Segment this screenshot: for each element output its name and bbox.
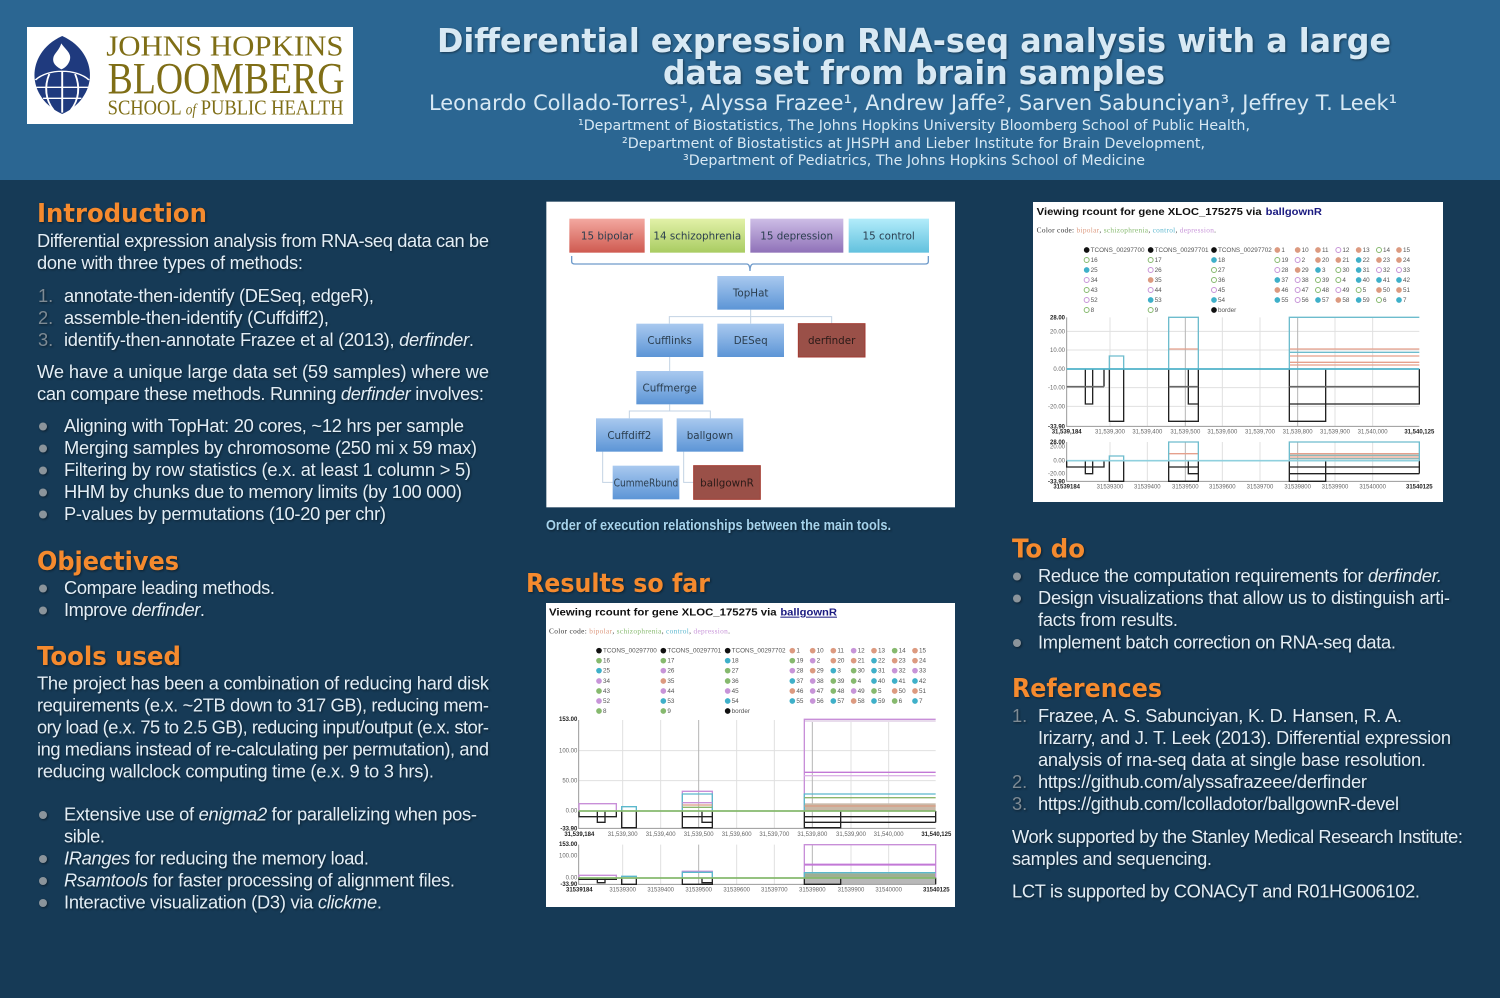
legend: 59: [878, 698, 886, 705]
legend: 58: [858, 698, 865, 705]
overview plot: -33.90: [1048, 479, 1066, 485]
legend: 52: [603, 698, 611, 705]
main plot: -10.00: [1048, 386, 1066, 392]
legend: 40: [878, 678, 886, 685]
legend: 30: [858, 668, 865, 675]
list: objectives: Improve derfinder.: [64, 599, 205, 620]
list: objectives: Compare leading methods.: [64, 577, 275, 598]
tool boxes: derfinder: [808, 335, 856, 347]
legend: 8: [603, 708, 607, 715]
list: derfinder steps: Aligning with TopHat: 20 cores, ~12 hrs per sample: [64, 415, 464, 436]
main plot: [1048, 315, 1435, 436]
main plot: 31,539,900: [836, 832, 867, 838]
legend: 53: [1155, 297, 1162, 304]
tool boxes: CummeRbund: [614, 477, 678, 489]
legend: 50: [899, 688, 906, 695]
legend: 22: [878, 658, 886, 665]
list: references: https://github.com/lcolladotor/ballgownR-devel: [1038, 793, 1399, 814]
legend: 7: [919, 698, 923, 705]
legend: 11: [1322, 247, 1329, 254]
legend: 9: [1155, 307, 1159, 314]
legend: 39: [837, 678, 845, 685]
main plot: 31,539,400: [646, 832, 676, 838]
list: to do items: Reduce the computation requirements for derfinder.: [1038, 565, 1442, 586]
legend: 11: [837, 648, 844, 655]
overview plot: 31539700: [1247, 485, 1274, 491]
overview plot: 31539800: [799, 887, 826, 893]
overview plot: -20.00: [1048, 472, 1066, 478]
legend: 6: [1383, 297, 1387, 304]
overview plot: 31539300: [609, 887, 637, 893]
main plot: 31,539,500: [684, 832, 714, 838]
overview plot: 31540125: [923, 887, 950, 893]
text block: LCT support: LCT is supported by CONACyT and R01HG006102.: [1012, 880, 1420, 902]
main plot: 31,539,800: [1283, 430, 1313, 436]
legend: 47: [1302, 287, 1309, 294]
legend: 12: [1342, 247, 1350, 254]
overview plot: -33.90: [560, 882, 578, 888]
legend: 46: [796, 688, 804, 695]
legend: 18: [1218, 257, 1226, 264]
title: Differential expression RNA-seq analysis with a large: [437, 21, 1391, 60]
main plot: [559, 717, 952, 838]
tool boxes: Cuffdiff2: [607, 430, 651, 442]
overview plot: [1048, 440, 1433, 491]
legend: 37: [1281, 277, 1289, 284]
main plot: 100.00: [559, 748, 578, 754]
list: derfinder steps: HHM by chunks due to memory limits (by 100 000): [64, 481, 462, 502]
chart title and colour code: Viewing rcount for gene XLOC_175275 via: [1037, 207, 1262, 218]
legend: 57: [837, 698, 845, 705]
text block: tools paragraph: requirements (e.x. ~2TB down to 317 GB), reducing mem-: [37, 694, 489, 716]
legend: 57: [1322, 297, 1330, 304]
list: to do items: Design visualizations that allow us to distinguish arti-: [1038, 587, 1450, 608]
logo: Johns Hopkins Bloomberg School of Public Health: BLOOMBERG: [108, 53, 345, 103]
legend: 9: [667, 708, 671, 715]
legend: 27: [732, 668, 739, 675]
main plot: 0.00: [566, 809, 578, 815]
legend: 12: [858, 648, 865, 655]
main plot: -33.90: [560, 827, 578, 833]
legend: 13: [878, 648, 886, 655]
overview plot: 20.00: [1050, 445, 1066, 451]
text block: data set: can compare these methods. Running derfinder involves:: [37, 383, 484, 404]
list: three method types: 1.: [38, 285, 53, 306]
legend: 38: [817, 678, 824, 685]
text block: intro: [37, 230, 489, 273]
overview plot: 0.00: [1053, 459, 1066, 465]
list: references: 3.: [1012, 793, 1027, 814]
legend: 49: [858, 688, 865, 695]
legend: 26: [667, 668, 675, 675]
legend: 44: [1155, 287, 1162, 294]
main plot: 31,539,700: [1245, 430, 1276, 436]
flowchart: order of execution: [546, 202, 955, 507]
legend: 27: [1218, 267, 1226, 274]
legend: 51: [919, 688, 927, 695]
legend: 45: [732, 688, 739, 695]
panel: introduction: [37, 199, 489, 524]
affiliations: [578, 118, 1250, 169]
legend: border: [732, 708, 750, 715]
legend: 31: [1363, 267, 1370, 274]
chart title and colour code: ballgownR: [780, 608, 837, 619]
overview plot: 31539184: [1053, 485, 1081, 491]
affiliations: ²Department of Biostatistics at JHSPH and Lieber Institute for Brain Development,: [622, 136, 1205, 152]
list: references: Frazee, A. S. Sabunciyan, K. D. Hansen, R. A.: [1038, 705, 1402, 726]
legend: 26: [1155, 267, 1162, 274]
heading: Tools used: Tools used: [37, 642, 181, 672]
sample boxes: 15 bipolar: [581, 231, 634, 243]
legend: 35: [667, 678, 675, 685]
legend: 45: [1218, 287, 1226, 294]
panel: objectives: [37, 547, 275, 620]
title: data set from brain samples: [663, 53, 1165, 92]
legend: 54: [732, 698, 739, 705]
list: tools: Interactive visualization (D3) via clickme.: [64, 892, 382, 912]
legend: 8: [1091, 307, 1095, 314]
legend: 3: [1322, 267, 1326, 274]
legend: 4: [1342, 277, 1346, 284]
main plot: 153.00: [559, 717, 578, 723]
overview plot: 31540125: [1406, 485, 1433, 491]
legend: 10: [817, 648, 824, 655]
legend: 1: [796, 648, 800, 655]
legend: 19: [796, 658, 804, 665]
text block: funding: Work supported by the Stanley Medical Research Institute:: [1012, 826, 1463, 847]
legend: 30: [1342, 267, 1350, 274]
overview plot: [559, 842, 950, 893]
overview plot: 31539900: [1322, 485, 1349, 491]
legend: 14: [899, 648, 906, 655]
overview plot: 31539184: [566, 887, 593, 893]
legend: 2: [817, 658, 821, 665]
main plot: 31,540,125: [921, 832, 952, 838]
legend: 50: [1383, 287, 1391, 294]
legend: TCONS_00297701: [667, 648, 722, 655]
list: to do items: facts from results.: [1038, 609, 1178, 630]
text block: data set: We have a unique large data set (59 samples) where we: [37, 361, 489, 382]
legend: 42: [919, 678, 927, 685]
legend: TCONS_00297700: [603, 648, 657, 655]
list: three method types: 2.: [38, 307, 53, 328]
legend: 36: [732, 678, 739, 685]
list: derfinder steps: P-values by permutations (10-20 per chr): [64, 503, 386, 524]
chart title and colour code: ballgownR: [1266, 207, 1322, 218]
legend: 5: [1363, 287, 1367, 294]
panel: references: [1012, 674, 1463, 902]
main plot: 10.00: [1050, 348, 1066, 354]
overview plot: 153.00: [559, 842, 578, 848]
list: to do items: [1013, 565, 1450, 652]
list: objectives: [39, 577, 275, 620]
text block: tools paragraph: The project has been a combination of reducing hard disk: [37, 672, 490, 694]
text block: tools paragraph: reducing wallclock computing time (e.x. 9 to 3 hrs).: [37, 760, 434, 782]
legend: TCONS_00297702: [1218, 247, 1272, 254]
legend: 43: [1091, 287, 1098, 294]
main plot: 31,540,000: [1358, 430, 1388, 436]
legend: 59: [1363, 297, 1370, 304]
header band: [0, 0, 1500, 180]
legend: 48: [837, 688, 845, 695]
legend: 21: [858, 658, 865, 665]
tool boxes: Cufflinks: [647, 335, 692, 347]
legend: 55: [796, 698, 804, 705]
legend: 24: [919, 658, 927, 665]
legend: 34: [603, 678, 611, 685]
main plot: -33.90: [1048, 424, 1066, 430]
legend: 54: [1218, 297, 1226, 304]
sample boxes: 14 schizophrenia: [653, 231, 741, 243]
chart title and colour code: [549, 608, 837, 635]
overview plot: 31539900: [838, 887, 865, 893]
list: three method types: identify-then-annotate Frazee et al (2013), derfinder.: [64, 329, 474, 350]
tool boxes: DESeq: [734, 335, 768, 347]
chart title and colour code: Viewing rcount for gene XLOC_175275 via: [549, 608, 777, 619]
legend: 13: [1363, 247, 1370, 254]
list: references: 1.: [1012, 705, 1027, 726]
main plot: 31,539,300: [1095, 430, 1126, 436]
legend: 20: [1322, 257, 1330, 264]
overview plot: 31540000: [1359, 485, 1387, 491]
legend: 16: [603, 658, 611, 665]
legend: 20: [837, 658, 845, 665]
legend: 7: [1403, 297, 1407, 304]
legend: border: [1218, 307, 1236, 314]
logo: Johns Hopkins Bloomberg School of Public Health: JOHNS HOPKINS: [106, 31, 344, 62]
main plot: 0.00: [1053, 367, 1066, 373]
legend: 32: [899, 668, 906, 675]
legend: 14: [1383, 247, 1391, 254]
main plot: 31,540,000: [874, 832, 904, 838]
list: derfinder steps: Merging samples by chromosome (250 mi x 59 max): [64, 437, 477, 458]
legend: 1: [1281, 247, 1285, 254]
legend: 56: [817, 698, 824, 705]
affiliations: ¹Department of Biostatistics, The Johns Hopkins University Bloomberg School of Public Health,: [578, 118, 1250, 134]
legend: 32: [1383, 267, 1391, 274]
list: references: https://github.com/alyssafrazeee/derfinder: [1038, 771, 1367, 792]
legend: 18: [732, 658, 739, 665]
chart title and colour code: Color code: bipolar, schizophrenia, control, depression.: [549, 626, 730, 635]
legend: 31: [878, 668, 886, 675]
legend: 48: [1322, 287, 1330, 294]
caption: flowchart: Order of execution relationships between the main tools.: [546, 517, 891, 534]
tool boxes: Cuffmerge: [643, 383, 697, 395]
list: derfinder steps: Filtering by row statistics (e.x. at least 1 column > 5): [64, 459, 471, 480]
list: references: [1012, 705, 1451, 814]
main plot: 31,539,500: [1170, 430, 1201, 436]
legend: 23: [899, 658, 906, 665]
legend: 51: [1403, 287, 1411, 294]
text block: intro: Differential expression analysis from RNA-seq data can be: [37, 230, 489, 251]
panel: tools used: [37, 642, 490, 912]
overview plot: 31539600: [723, 887, 751, 893]
main plot: 31,539,800: [797, 832, 828, 838]
legend: 22: [1363, 257, 1370, 264]
heading: References: References: [1012, 674, 1162, 704]
legend: 35: [1155, 277, 1162, 284]
legend: 40: [1363, 277, 1370, 284]
legend: 38: [1302, 277, 1309, 284]
overview plot: 31539700: [761, 887, 788, 893]
chart panel: bottom ballgownR view: [546, 603, 955, 907]
authors: Leonardo Collado-Torres¹, Alyssa Frazee¹, Andrew Jaffe², Sarven Sabunciyan³, Jeffrey T. Leek¹: [429, 91, 1397, 115]
legend: 4: [858, 678, 862, 685]
legend: 44: [667, 688, 675, 695]
legend: TCONS_00297702: [732, 648, 786, 655]
legend: 52: [1091, 297, 1098, 304]
overview plot: 31539500: [1172, 485, 1199, 491]
chart title and colour code: Color code: bipolar, schizophrenia, control, depression.: [1037, 226, 1216, 235]
legend: 58: [1342, 297, 1350, 304]
main plot: 31,539,184: [1052, 430, 1082, 436]
tool boxes: ballgown: [687, 430, 733, 442]
list: three method types: 3.: [38, 329, 53, 350]
legend: 29: [817, 668, 824, 675]
legend: 19: [1281, 257, 1289, 264]
heading: To do: To do: [1012, 534, 1085, 564]
heading: Objectives: Objectives: [37, 547, 179, 577]
legend: 42: [1403, 277, 1411, 284]
list: references: 2.: [1012, 771, 1027, 792]
overview plot: 28.00: [1050, 440, 1066, 446]
text block: intro: done with three types of methods:: [37, 252, 303, 273]
legend: 23: [1383, 257, 1391, 264]
legend: 16: [1091, 257, 1098, 264]
text block: funding: samples and sequencing.: [1012, 848, 1212, 869]
tool boxes: [596, 276, 865, 499]
legend: TCONS_00297700: [1091, 247, 1145, 254]
text block: tools paragraph: ory load (e.x. 75 to 2.5 GB), reducing input/output (e.x. stor-: [37, 716, 489, 738]
tool boxes: TopHat: [732, 288, 768, 300]
legend: 34: [1091, 277, 1098, 284]
main plot: 31,539,600: [1207, 430, 1238, 436]
list: three method types: annotate-then-identify (DESeq, edgeR),: [64, 285, 374, 306]
legend: 33: [919, 668, 927, 675]
overview plot: 100.00: [559, 854, 578, 860]
legend: 37: [796, 678, 804, 685]
overview plot: 31539400: [1134, 485, 1161, 491]
legend: 3: [837, 668, 841, 675]
overview plot: 31539600: [1209, 485, 1236, 491]
tool boxes: ballgownR: [700, 477, 754, 489]
main plot: 28.00: [1050, 315, 1066, 321]
legend: 33: [1403, 267, 1411, 274]
legend: 15: [1403, 247, 1411, 254]
list: derfinder steps: [39, 415, 477, 524]
legend: 28: [1281, 267, 1289, 274]
legend: 43: [603, 688, 611, 695]
list: to do items: Implement batch correction on RNA-seq data.: [1038, 632, 1396, 652]
legend: 55: [1281, 297, 1289, 304]
logo: Johns Hopkins Bloomberg School of Public Health: [27, 27, 353, 124]
heading: Results so far: Results so far: [526, 569, 710, 599]
legend: 25: [1091, 267, 1098, 274]
legend: 6: [899, 698, 903, 705]
heading: Introduction: Introduction: [37, 199, 207, 229]
main plot: 31,539,300: [608, 832, 638, 838]
legend: 17: [1155, 257, 1162, 264]
legend: 25: [603, 668, 611, 675]
list: three method types: [38, 285, 474, 350]
legend: 2: [1302, 257, 1306, 264]
main plot: 31,539,900: [1320, 430, 1351, 436]
legend: 41: [899, 678, 906, 685]
logo: Johns Hopkins Bloomberg School of Public Health: SCHOOL of PUBLIC HEALTH: [108, 95, 344, 119]
connectors: [572, 256, 928, 482]
sample boxes: [569, 219, 929, 253]
chart title and colour code: [1037, 207, 1322, 235]
text block: tools paragraph: [37, 672, 490, 782]
text block: tools paragraph: ing medians instead of re-calculating per permutation), and: [37, 738, 489, 760]
legend: 39: [1322, 277, 1330, 284]
legend: 17: [667, 658, 675, 665]
affiliations: ³Department of Pediatrics, The Johns Hopkins School of Medicine: [683, 153, 1145, 169]
legend: TCONS_00297701: [1155, 247, 1209, 254]
list: references: analysis of rna-seq data at single base resolution.: [1038, 749, 1426, 770]
legend: 29: [1302, 267, 1309, 274]
legend: 28: [796, 668, 804, 675]
overview plot: 0.00: [566, 876, 578, 882]
legend: 24: [1403, 257, 1411, 264]
main plot: 31,540,125: [1404, 430, 1435, 436]
legend: 36: [1218, 277, 1226, 284]
main plot: 31,539,600: [722, 832, 752, 838]
text block: data set: [37, 361, 489, 404]
main plot: 20.00: [1050, 329, 1066, 335]
list: references: Irizarry, and J. T. Leek (2013). Differential expression: [1038, 727, 1451, 748]
legend: 46: [1281, 287, 1289, 294]
main plot: 31,539,700: [759, 832, 790, 838]
sample boxes: 15 control: [863, 231, 915, 243]
chart panel: top ballgownR view: [1033, 202, 1443, 502]
main plot: -20.00: [1048, 404, 1066, 410]
text block: funding: [1012, 826, 1463, 869]
overview plot: 31540000: [875, 887, 903, 893]
list: tools: Rsamtools for faster processing of alignment files.: [64, 870, 455, 890]
overview plot: 31539500: [685, 887, 713, 893]
main plot: 31,539,184: [564, 832, 595, 838]
list: tools: [39, 804, 477, 912]
overview plot: 31539400: [647, 887, 675, 893]
legend: 47: [817, 688, 824, 695]
sample boxes: 15 depression: [760, 231, 833, 243]
legend: 49: [1342, 287, 1350, 294]
overview plot: 31539800: [1284, 485, 1312, 491]
title: [437, 21, 1391, 92]
legend: 15: [919, 648, 927, 655]
legend: [1084, 247, 1411, 314]
list: tools: sible.: [64, 826, 105, 846]
overview plot: 31539300: [1097, 485, 1124, 491]
list: tools: Extensive use of enigma2 for parallelizing when pos-: [64, 804, 477, 824]
panel: to do: [1012, 534, 1450, 652]
legend: 41: [1383, 277, 1391, 284]
legend: 10: [1302, 247, 1309, 254]
legend: 53: [667, 698, 675, 705]
list: tools: IRanges for reducing the memory load.: [64, 848, 369, 868]
legend: 5: [878, 688, 882, 695]
legend: [596, 648, 927, 715]
legend: 56: [1302, 297, 1309, 304]
legend: 21: [1342, 257, 1350, 264]
list: three method types: assemble-then-identify (Cuffdiff2),: [64, 307, 329, 328]
main plot: 31,539,400: [1132, 430, 1163, 436]
main plot: 50.00: [562, 778, 578, 784]
